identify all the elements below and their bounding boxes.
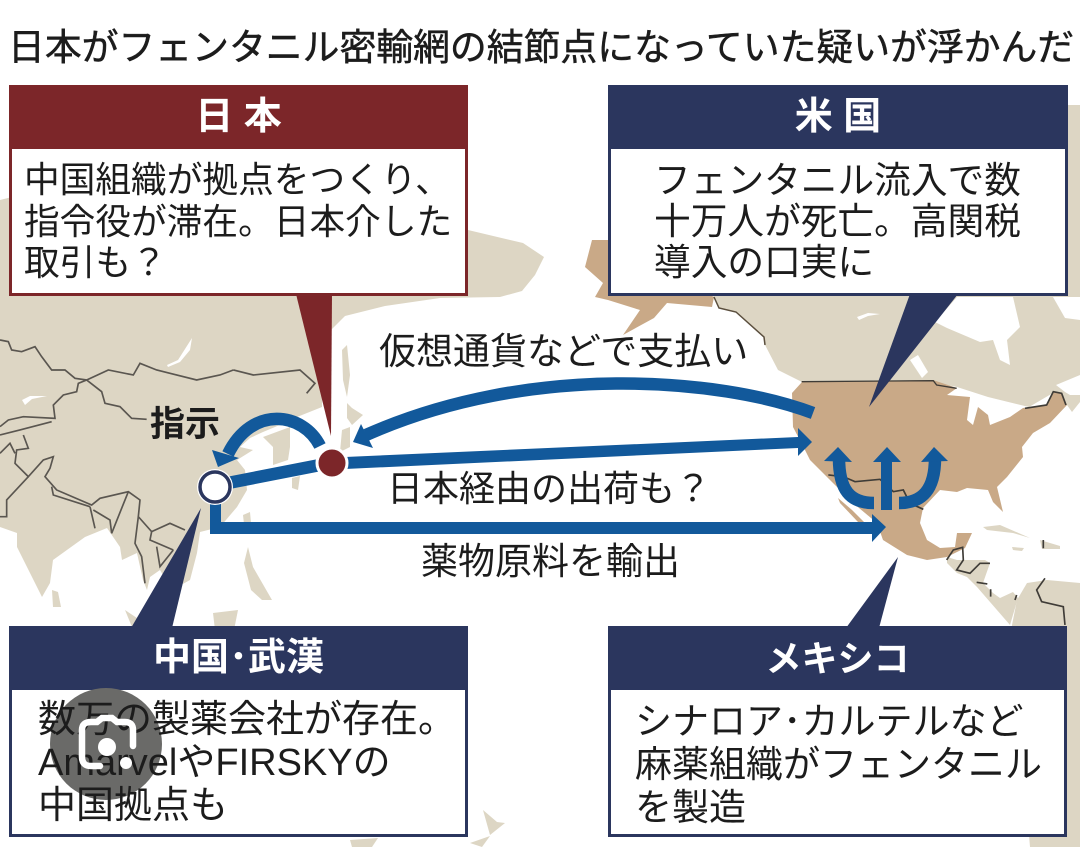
marker: Japan: [317, 448, 347, 478]
arrow: instructions from Japan to China: [212, 419, 320, 467]
label: precursor export: 薬物原料を輸出: [421, 541, 680, 582]
label: crypto payment: 仮想通貨などで支払い: [379, 331, 748, 372]
text: China Wuhan: 中国拠点も: [38, 785, 228, 827]
panel: China Wuhan: [9, 626, 468, 837]
text: Mexico: [635, 701, 1042, 828]
text: United States: フェンタニル流入で数: [654, 160, 1021, 201]
text: Mexico: を製造: [635, 787, 746, 828]
line: China to Japan: [228, 465, 320, 483]
map: Hudson Bay and inland water: [22, 297, 1080, 405]
marker: Wuhan: [197, 469, 233, 505]
map: Asia borders: [0, 340, 315, 583]
text: Mexico: 麻薬組織がフェンタニル: [635, 744, 1042, 785]
pointer: Mexico: [846, 557, 898, 628]
text: United States: [654, 160, 1021, 283]
text: China Wuhan: AmarvelやFIRSKYの: [38, 742, 391, 784]
arrows: distribution into United States: [824, 447, 948, 510]
text: China Wuhan: 数万の製薬会社が存在。: [38, 699, 456, 741]
panel: United States: [608, 85, 1068, 296]
pointer: China: [131, 508, 201, 628]
map: Asia land: [0, 190, 544, 847]
heading: Mexico: [608, 626, 1067, 690]
map: United States and Mexico land: [585, 240, 1067, 560]
heading: Mexico: メキシコ: [765, 638, 910, 679]
heading: United States: 米 国: [795, 96, 881, 138]
heading: Japan: 日 本: [195, 96, 282, 138]
map: Canada and Latin America land: [708, 105, 1080, 847]
heading: China Wuhan: 中国･武漢: [153, 637, 324, 679]
arrow: crypto payment to Japan: [353, 383, 813, 448]
heading: Japan: [9, 85, 468, 149]
label: shipment via Japan: 日本経由の出荷も？: [387, 468, 711, 509]
panel: Japan: [9, 85, 468, 296]
title: 日本がフェンタニル密輸網の結節点になっていた疑いが浮かんだ: [8, 27, 1074, 68]
heading: China Wuhan: [9, 626, 468, 690]
text: United States: 十万人が死亡。高関税: [654, 201, 1021, 242]
arrow: shipment via Japan: [345, 428, 812, 469]
icon: lens badge: [50, 688, 162, 800]
text: United States: 導入の口実に: [654, 242, 874, 283]
arrow: precursor export to Mexico: [210, 500, 886, 542]
pointer: United States: [869, 294, 958, 407]
text: China Wuhan: [38, 699, 456, 827]
text: Mexico: シナロア･カルテルなど: [635, 701, 1024, 742]
map: Alaska border: [714, 297, 765, 345]
label: instructions: 指示: [150, 405, 220, 444]
text: Japan: 中国組織が拠点をつくり、: [24, 160, 451, 200]
text: Japan: 指令役が滞在。日本介した: [24, 202, 452, 242]
text: Japan: 取引も？: [24, 243, 167, 283]
panel: Mexico: [608, 626, 1067, 837]
heading: United States: [608, 85, 1068, 149]
map: Americas borders: [802, 381, 1066, 625]
text: Japan: [24, 160, 452, 283]
pointer: Japan: [296, 294, 332, 436]
